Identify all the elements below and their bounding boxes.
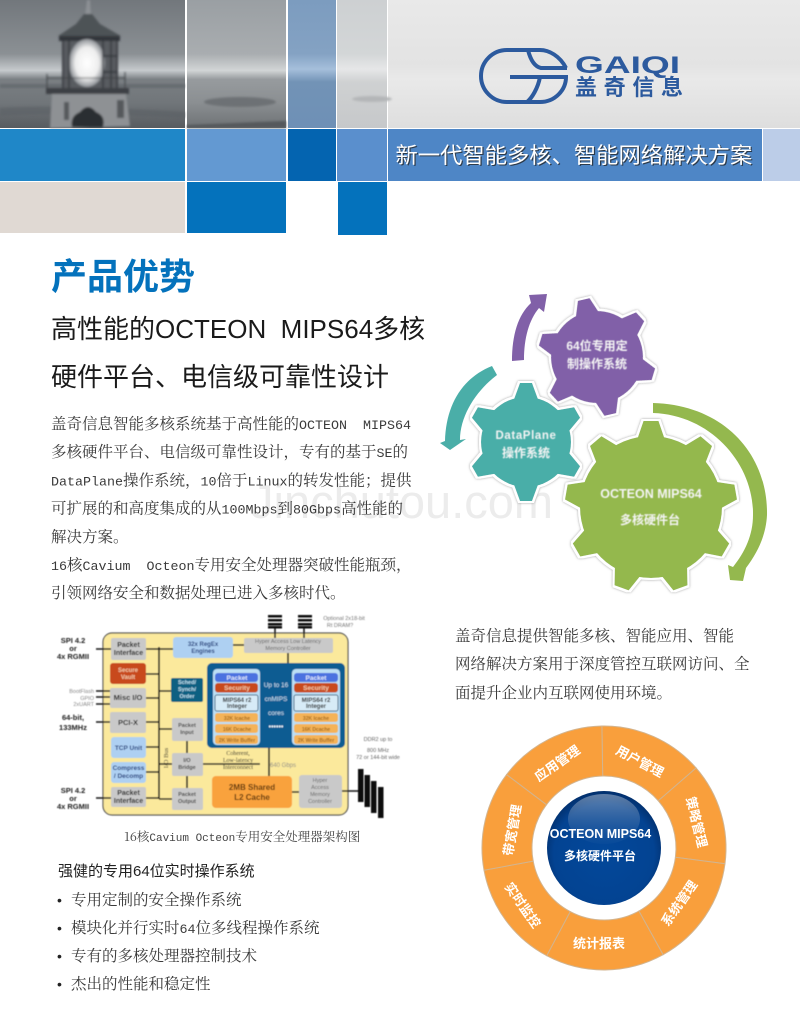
body text	[51, 412, 412, 603]
banner with slogan: 新一代智能多核、智能网络解决方案	[397, 144, 753, 169]
diagram labels: Synch/	[178, 687, 196, 693]
diagram labels: 16K Dcache	[302, 727, 330, 733]
gear labels: 多核硬件台	[620, 512, 680, 527]
segment labels: 策略管理	[683, 795, 710, 849]
diagram labels: Controller	[308, 799, 332, 805]
right paragraph: 面提升企业内互联网使用环境。	[455, 681, 672, 703]
icon: lighthouse	[46, 0, 130, 128]
diagram labels: Misc I/O	[114, 693, 143, 702]
feature bullet list: •	[57, 976, 62, 992]
gear labels: 制操作系统	[567, 356, 627, 371]
ring chart	[482, 726, 726, 970]
diagram labels: L2 Cache	[234, 793, 270, 802]
diagram labels: 72 or 144-bit wide	[356, 755, 400, 761]
diagram labels: Engines	[191, 649, 215, 655]
logo: GAIQI: GAIQI	[575, 52, 680, 79]
feature bullet list: •	[57, 892, 62, 908]
diagram labels: Interface	[114, 650, 143, 657]
diagram labels: Hyper Access Low Latency	[255, 639, 321, 645]
body text: DataPlane操作系统，10倍于Linux的转发性能；提供	[51, 468, 412, 490]
diagram labels: BootFlash	[69, 689, 94, 695]
arrow: purple	[512, 294, 547, 361]
feature bullet list: •	[57, 920, 62, 936]
subtitle: 硬件平台、电信级可靠性设计	[51, 362, 389, 392]
diagram labels: Packet	[117, 790, 140, 797]
centre sphere: OCTEON MIPS64	[550, 827, 651, 841]
feature bullet list: 专用定制的安全操作系统	[71, 888, 242, 910]
diagram labels: 32x RegEx	[188, 642, 219, 648]
diagram labels: Security	[224, 685, 250, 692]
banner with slogan	[388, 129, 762, 181]
segment labels: 实时监控	[502, 880, 544, 931]
feature list heading: 强健的专用64位实时操作系统	[58, 863, 255, 880]
colour blocks row 3	[0, 182, 387, 235]
feature bullet list: 模块化并行实时64位多线程操作系统	[71, 916, 320, 938]
arrow: green	[653, 403, 767, 581]
diagram labels: 16K Dcache	[223, 727, 251, 733]
diagram labels: Packet	[227, 675, 248, 682]
diagram labels: Integer	[227, 704, 248, 710]
diagram labels: Low-latency	[223, 758, 253, 764]
diagram caption: 16核Cavium Octeon专用安全处理器架构图	[124, 827, 360, 845]
segment labels: 系统管理	[658, 878, 700, 929]
diagram labels: 800 MHz	[367, 748, 389, 754]
gear labels: OCTEON MIPS64	[600, 487, 702, 501]
diagram labels: TCP Unit	[115, 745, 143, 752]
segment labels	[501, 742, 710, 951]
diagram labels: Integer	[306, 704, 327, 710]
diagram labels: Interconnect	[223, 765, 253, 771]
right paragraph: 盖奇信息提供智能多核、智能应用、智能	[455, 624, 734, 646]
segment labels: 用户管理	[613, 743, 666, 780]
diagram labels: 2K Write Buffer	[298, 738, 334, 744]
diagram labels: Sched/	[178, 680, 196, 686]
logo: GAIQI	[481, 50, 683, 102]
diagram labels: Rt DRAM?	[327, 623, 353, 629]
watermark: Jinchutou.com	[250, 475, 553, 528]
diagram labels	[57, 616, 400, 811]
diagram labels: Packet	[178, 792, 196, 798]
diagram labels: MIPS64 r2	[223, 698, 252, 704]
arrow: teal	[440, 366, 497, 450]
diagram labels: 2K Write Buffer	[219, 738, 255, 744]
ring segments	[482, 726, 726, 970]
gear labels: DataPlane	[495, 430, 557, 442]
diagram labels: Hyper	[313, 778, 328, 784]
architecture block diagram	[57, 615, 400, 818]
diagram labels: Input	[180, 730, 194, 736]
diagram labels: 133MHz	[59, 723, 87, 732]
diagram labels: MIPS64 r2	[302, 698, 331, 704]
diagram labels: I/O Bus	[163, 747, 170, 768]
banner with slogan: 新一代智能多核、智能网络解决方案	[396, 143, 752, 168]
icon: G logo mark	[481, 50, 567, 102]
diagram labels: Security	[303, 685, 329, 692]
diagram labels: 4x RGMII	[57, 802, 89, 811]
body text: 解决方案。	[51, 525, 129, 547]
diagram labels: SPI 4.2	[61, 636, 85, 645]
diagram labels: Bridge	[178, 765, 196, 771]
gear labels	[495, 338, 702, 527]
diagram labels: I/O	[183, 758, 191, 764]
diagram labels: Compress	[113, 765, 145, 772]
gear: teal	[468, 383, 584, 501]
right paragraph: 网络解决方案用于深度管控互联网访问、全	[455, 652, 750, 674]
centre sphere	[547, 791, 661, 905]
segment labels: 统计报表	[573, 936, 625, 951]
right paragraph	[455, 624, 750, 703]
diagram labels: Optional 2x18-bit	[323, 616, 365, 622]
diagram labels: 2MB Shared	[229, 783, 275, 792]
diagram labels: 640 Gbps	[270, 763, 296, 769]
subtitle	[51, 314, 425, 392]
left boxes	[110, 638, 342, 810]
core panels	[213, 669, 340, 745]
diagram labels: Interface	[114, 798, 143, 805]
board	[103, 633, 348, 815]
core block	[207, 663, 345, 748]
diagram labels: ••••••	[269, 724, 284, 731]
diagram labels: Access	[311, 785, 329, 791]
body text: 盖奇信息智能多核系统基于高性能的OCTEON MIPS64	[51, 412, 411, 434]
diagram labels: cores	[268, 710, 285, 717]
bus lines	[96, 628, 362, 799]
diagram labels: cnMIPS	[265, 696, 288, 703]
colour blocks row 2	[0, 129, 800, 181]
diagram labels: or	[69, 644, 77, 653]
memory chips	[268, 615, 384, 818]
subtitle: 高性能的OCTEON MIPS64多核	[51, 314, 425, 344]
diagram labels: DDR2 up to	[364, 737, 392, 743]
diagram labels: SPI 4.2	[61, 786, 85, 795]
diagram labels: or	[69, 794, 77, 803]
diagram labels: 4x RGMII	[57, 652, 89, 661]
feature bullet list: •	[57, 948, 62, 964]
body text: 可扩展的和高度集成的从100Mbps到80Gbps高性能的	[51, 496, 403, 518]
body text: 16核Cavium Octeon专用安全处理器突破性能瓶颈，	[51, 553, 412, 575]
body text: 多核硬件平台、电信级可靠性设计，专有的基于SE的	[51, 440, 408, 462]
feature bullet list: 杰出的性能和稳定性	[71, 972, 211, 994]
gear: green	[564, 421, 738, 593]
diagram labels: Packet	[306, 675, 327, 682]
diagram labels: 64-bit,	[62, 713, 84, 722]
diagram labels: Vault	[121, 675, 135, 681]
diagram labels: GPIO	[80, 696, 95, 702]
diagram labels: Memory	[310, 792, 330, 798]
header photo strip with lighthouse	[0, 0, 800, 128]
heading: product advantages: 产品优势	[51, 256, 195, 297]
diagram labels: Output	[178, 799, 196, 805]
diagram labels: PCI-X	[118, 718, 138, 727]
diagram labels: Coherent,	[226, 751, 250, 757]
segment labels: 带宽管理	[501, 803, 524, 857]
diagram labels: 32K Icache	[224, 716, 250, 722]
centre sphere: 多核硬件平台	[564, 848, 636, 863]
diagram labels: Packet	[117, 642, 140, 649]
gear labels: 64位专用定	[566, 338, 628, 353]
diagram labels: / Decomp	[114, 773, 143, 780]
diagram labels: Secure	[118, 668, 139, 674]
diagram labels: Order	[180, 694, 195, 700]
body text: 引领网络安全和数据处理已进入多核时代。	[51, 581, 346, 603]
diagram labels: Packet	[178, 723, 196, 729]
diagram labels: 2xUART	[73, 702, 95, 708]
logo: GAIQI: 盖奇信息	[575, 70, 683, 102]
gear labels: 操作系统	[502, 445, 550, 460]
feature bullet list	[57, 888, 320, 994]
gear: purple	[528, 287, 666, 427]
diagram labels: Up to 16	[264, 682, 289, 689]
gear diagram	[440, 287, 767, 593]
diagram labels: Memory Controller	[265, 646, 311, 652]
segment labels: 应用管理	[532, 742, 583, 784]
diagram labels: 32K Icache	[303, 716, 329, 722]
feature bullet list: 专有的多核处理器控制技术	[71, 944, 258, 966]
